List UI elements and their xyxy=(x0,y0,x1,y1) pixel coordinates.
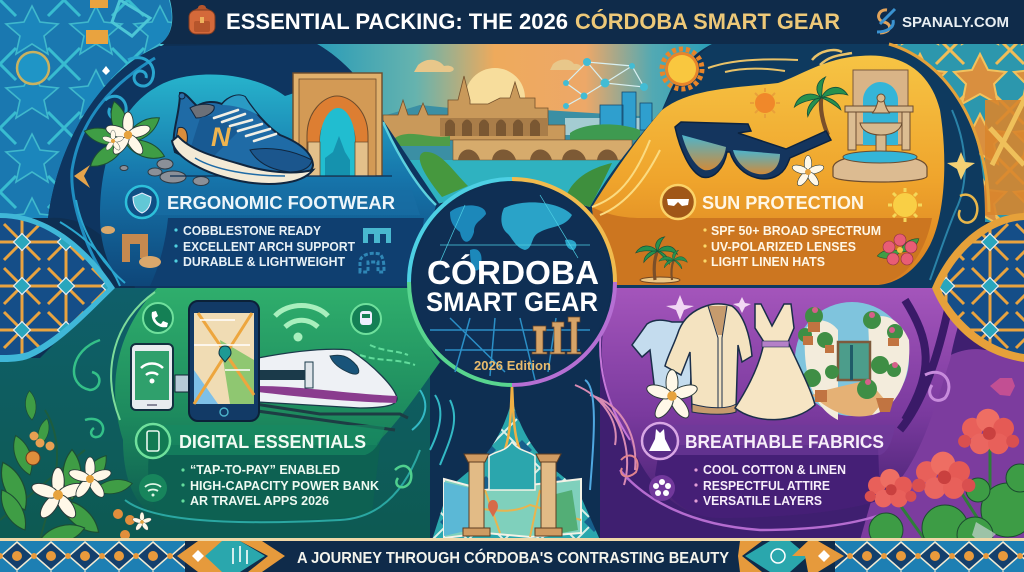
panel: sun protection xyxy=(590,44,989,288)
bullet list: fabrics: RESPECTFUL ATTIRE xyxy=(703,478,830,493)
bullet list: footwear: EXCELLENT ARCH SUPPORT xyxy=(183,239,355,254)
heading: digital essentials: DIGITAL ESSENTIALS xyxy=(179,432,366,452)
bullet list: sun: LIGHT LINEN HATS xyxy=(711,254,825,269)
icon: orange blossom plant xyxy=(0,390,152,548)
panel: breathable fabrics xyxy=(575,288,1024,553)
icon: aqueduct and arch xyxy=(360,228,391,272)
world map xyxy=(450,202,576,271)
icon: stones xyxy=(120,159,209,186)
icon: small phone xyxy=(131,344,173,410)
street grid xyxy=(430,318,590,380)
title bar xyxy=(160,0,1024,44)
icon: white flower xyxy=(645,370,699,421)
title text xyxy=(226,9,840,34)
edition label: 2026 Edition xyxy=(474,358,551,373)
diamonds left xyxy=(177,541,285,572)
icon: island palms xyxy=(636,237,687,283)
heading: sun protection: SUN PROTECTION xyxy=(702,193,864,213)
icon: running shoe xyxy=(172,93,313,184)
heading: digital essentials xyxy=(136,424,385,458)
icon: fold-out map xyxy=(444,479,581,538)
heading: ergonomic footwear: ERGONOMIC FOOTWEAR xyxy=(167,193,395,213)
icon: cardigan xyxy=(665,304,752,414)
pattern: top right corner xyxy=(890,44,1024,222)
bullet list: footwear: COBBLESTONE READY xyxy=(183,223,321,238)
bullet list: footwear: DURABLE & LIGHTWEIGHT xyxy=(183,254,345,269)
bullet list: digital: “TAP-TO-PAY” ENABLED xyxy=(190,462,340,477)
icon: high speed train xyxy=(175,349,408,430)
panel: digital essentials xyxy=(0,288,454,548)
icon: call badge xyxy=(143,303,173,333)
bullet list: digital xyxy=(181,462,380,508)
bottom center tile and map xyxy=(432,385,600,540)
icon: orange blossom xyxy=(82,99,167,172)
icon: hibiscus xyxy=(877,234,921,265)
heading: ergonomic footwear xyxy=(126,186,395,218)
icon: backpack xyxy=(189,5,215,34)
icon: small arch and stones xyxy=(101,226,161,268)
heading: sun protection xyxy=(661,185,864,219)
bullet list: fabrics: VERSATILE LAYERS xyxy=(703,493,822,508)
icon: plumeria xyxy=(791,156,825,188)
pattern: right middle blob xyxy=(932,213,1024,362)
bullet list: footwear xyxy=(174,223,355,269)
tile strip left xyxy=(0,541,185,572)
panel: ergonomic footwear xyxy=(48,44,440,288)
title text: CÓRDOBA SMART GEAR xyxy=(575,9,840,34)
bullet list: digital: AR TRAVEL APPS 2026 xyxy=(190,493,329,508)
icon: right column xyxy=(535,454,562,536)
heading: breathable fabrics xyxy=(642,423,895,459)
icon: left column xyxy=(463,454,490,536)
icon: sunglasses xyxy=(675,122,831,179)
pattern: top left corner xyxy=(0,0,173,218)
icon: running shoe: N xyxy=(211,122,231,152)
icon: small sun xyxy=(750,88,780,118)
icon: wifi badge xyxy=(139,474,167,502)
icon: sun right xyxy=(888,188,922,222)
icon: wifi large xyxy=(275,306,328,342)
pattern: left middle blob xyxy=(0,213,115,362)
emblem title xyxy=(426,254,599,317)
icon: geranium plant xyxy=(865,409,1024,553)
icon: shield badge xyxy=(126,186,158,218)
text strip xyxy=(150,218,424,286)
emblem title: CÓRDOBA xyxy=(427,254,599,291)
bullet list: sun: UV-POLARIZED LENSES xyxy=(711,239,856,254)
icon: dress badge xyxy=(642,423,678,459)
icon: fountain xyxy=(833,70,927,182)
icon: polo shirt xyxy=(632,320,695,392)
network nodes xyxy=(563,58,648,109)
bullet list: sun xyxy=(703,223,881,269)
city skyline illustration xyxy=(317,44,712,210)
icon: phone badge xyxy=(136,424,170,458)
heading: breathable fabrics: BREATHABLE FABRICS xyxy=(685,432,884,452)
diamonds right xyxy=(738,541,844,572)
icon: three columns xyxy=(532,317,581,354)
bullet list: fabrics xyxy=(694,462,846,508)
icon: smartphone with map xyxy=(189,301,259,421)
logo: spanaly: SPANALY.COM xyxy=(902,15,1009,31)
icon: mosque arch xyxy=(170,73,392,176)
tile strip right xyxy=(835,541,1024,572)
icon: train badge xyxy=(351,304,381,334)
icon: large sun xyxy=(662,49,702,89)
bullet list: fabrics: COOL COTTON & LINEN xyxy=(703,462,846,477)
bullet list: digital: HIGH-CAPACITY POWER BANK xyxy=(190,478,380,493)
decorative strokes: wind xyxy=(708,50,852,72)
icon: watermark gem xyxy=(972,522,996,546)
icon: dress xyxy=(735,304,815,420)
bullet list: sun: SPF 50+ BROAD SPECTRUM xyxy=(711,223,881,238)
heading strip xyxy=(122,190,420,215)
footer caption: A JOURNEY THROUGH CÓRDOBA'S CONTRASTING BEAUTY xyxy=(297,548,729,567)
icon: sunglasses badge xyxy=(661,185,695,219)
icon: flower badge xyxy=(649,475,675,501)
footer xyxy=(0,538,1024,572)
emblem title: SMART GEAR xyxy=(426,287,598,317)
title text: ESSENTIAL PACKING: THE 2026 xyxy=(226,9,568,34)
center emblem xyxy=(409,179,615,385)
logo: spanaly xyxy=(877,9,1009,33)
icon: palm xyxy=(789,73,856,142)
decorative arch keystone xyxy=(489,442,535,490)
icon: patio with geraniums xyxy=(795,302,909,420)
